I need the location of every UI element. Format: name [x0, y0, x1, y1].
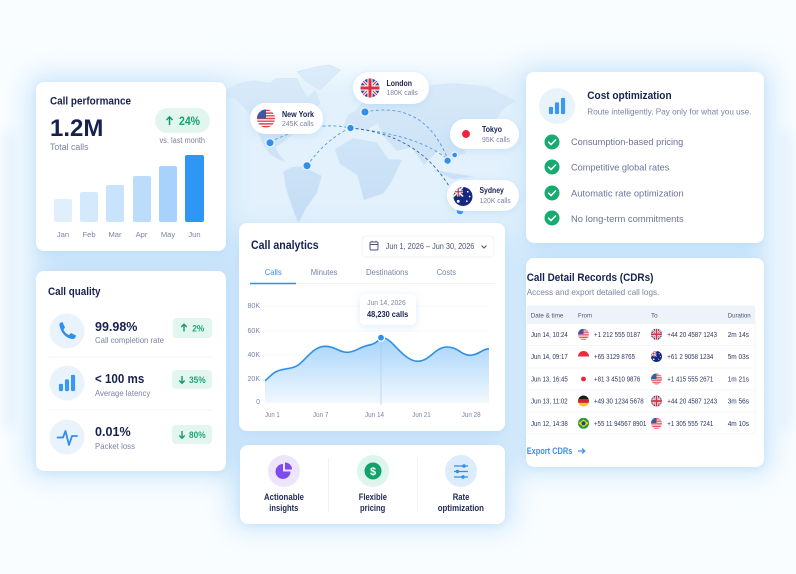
row 5: +1 305 555 7241 [667, 421, 713, 428]
bar chart: May [161, 230, 175, 239]
bar chart: Jan [57, 230, 69, 239]
heading: call performance: Call performance [50, 96, 131, 108]
table [527, 306, 755, 434]
benefit: rate optimization: optimization [438, 503, 484, 513]
row 2: +61 2 9058 1234 [667, 354, 713, 361]
metric: packet loss: 80% [189, 430, 206, 441]
area chart: Jun 7 [313, 412, 328, 419]
bar chart: Mar [108, 230, 122, 239]
row 2: +65 3129 8765 [594, 354, 635, 361]
checklist: Automatic rate optimization [571, 188, 684, 200]
panel: call analytics [239, 223, 505, 431]
connection arcs [270, 110, 460, 208]
heading: call analytics: Call analytics [251, 238, 319, 252]
metric: packet loss: Packet loss [95, 441, 135, 451]
panel: cost optimization [526, 72, 764, 243]
panel: call detail records [526, 258, 764, 467]
panel: call quality [36, 271, 226, 471]
row 3 [531, 374, 749, 384]
benefit: actionable insights [264, 455, 304, 513]
row 2 [531, 351, 749, 362]
map label: New York [250, 103, 323, 134]
background glow [30, 66, 770, 527]
date range selector: Jun 1, 2026 – Jun 30, 2026 [386, 241, 475, 251]
area chart: Jun 14 [365, 412, 384, 419]
row 4: 3m 56s [728, 398, 749, 406]
map label: Sydney: Sydney [480, 185, 504, 195]
tooltip: Jun 14, 2026 [367, 298, 406, 307]
map label: London [353, 72, 429, 104]
row 5: Jun 12, 14:38 [531, 421, 568, 428]
map label: Tokyo: 95K calls [482, 137, 510, 144]
metric: latency [50, 366, 212, 400]
row 5 [531, 418, 749, 429]
checklist: Consumption-based pricing [571, 137, 683, 148]
map label: Sydney [447, 180, 519, 211]
benefit: flexible pricing [357, 455, 389, 513]
tooltip [360, 294, 416, 325]
subtitle: Access and export detailed call logs. [527, 287, 659, 297]
bar chart [54, 155, 204, 239]
row 5: +55 11 94567 8901 [594, 421, 646, 428]
panel: call performance [36, 82, 226, 251]
table: From [578, 312, 592, 320]
date range selector [362, 236, 494, 257]
area chart: 40K [248, 352, 260, 359]
checklist [544, 134, 684, 226]
metric: completion rate: 2% [192, 324, 205, 334]
row 4 [531, 396, 749, 407]
total calls figure: 1.2M [50, 115, 103, 142]
metric: completion rate: 99.98% [95, 320, 137, 334]
row 4: +44 20 4587 1243 [667, 398, 717, 406]
map label: London: 180K calls [386, 90, 418, 97]
growth badge: 24% [179, 116, 200, 128]
tabs: Minutes [311, 267, 337, 277]
growth badge [155, 108, 210, 133]
row 4: +49 30 1234 5678 [594, 398, 644, 406]
table: Duration [728, 312, 751, 320]
row 4: Jun 13, 11:02 [531, 398, 568, 406]
bar chart: Feb [82, 230, 96, 239]
table: Date & time [531, 312, 564, 320]
area chart: 80K [248, 303, 260, 310]
metric: packet loss [50, 420, 212, 454]
area chart: Jun 21 [412, 412, 431, 419]
total calls label: Total calls [50, 142, 89, 152]
metric: packet loss: 0.01% [95, 425, 131, 439]
row 2: Jun 14, 09:17 [531, 354, 568, 361]
tabs: Destinations [366, 267, 408, 277]
map label: London: London [386, 78, 412, 88]
heading: cost optimization: Cost optimization [587, 90, 672, 102]
metric: latency: 35% [189, 375, 206, 386]
area chart: 60K [248, 328, 260, 335]
row 3: +81 3 4510 9876 [594, 376, 640, 384]
comparison label: vs. last month [160, 136, 205, 145]
benefit: rate optimization: Rate [453, 492, 469, 502]
row 1 [531, 329, 749, 340]
row 1: Jun 14, 10:24 [531, 332, 568, 339]
map label: Sydney: 120K calls [480, 198, 511, 205]
area chart [248, 303, 490, 419]
row 1: +44 20 4587 1243 [667, 332, 717, 339]
benefit: actionable insights: insights [269, 503, 298, 513]
row 3: Jun 13, 16:45 [531, 376, 568, 384]
row 3: +1 415 555 2671 [667, 376, 713, 384]
bar chart: Apr [136, 230, 148, 239]
row 2: 5m 03s [728, 354, 749, 361]
metric: latency: Average latency [95, 388, 151, 398]
area chart: 0 [256, 399, 260, 406]
metric: completion rate: Call completion rate [95, 335, 164, 345]
benefit: flexible pricing: Flexible [359, 492, 387, 502]
bar chart: Jun [188, 230, 201, 239]
panel: benefits [240, 445, 505, 524]
export link: Export CDRs [527, 446, 572, 456]
area chart: 20K [248, 376, 260, 383]
metric: latency: < 100 ms [95, 372, 144, 386]
subtitle: Route intelligently. Pay only for what you use. [587, 106, 752, 116]
benefit: rate optimization [438, 455, 484, 513]
row 1: 2m 14s [728, 332, 749, 339]
heading: call quality: Call quality [48, 286, 100, 298]
tabs [250, 267, 495, 284]
tabs: Costs [437, 267, 456, 277]
benefit: flexible pricing: pricing [360, 503, 385, 513]
row 1: +1 212 555 0187 [594, 332, 640, 339]
table: To [651, 312, 658, 320]
checklist: No long-term commitments [571, 214, 684, 225]
heading: CDRs: Call Detail Records (CDRs) [527, 272, 654, 284]
area chart: Jun 1 [265, 412, 280, 419]
world map [227, 65, 515, 223]
edge bands [7, 130, 790, 430]
map label: New York: New York [282, 109, 314, 119]
icon: signal bars [539, 88, 575, 124]
tabs: Calls [265, 267, 282, 277]
map pins [266, 108, 464, 215]
map label: Tokyo [450, 119, 519, 149]
area chart: Jun 28 [462, 412, 481, 419]
benefit: flexible pricing: $ [370, 466, 376, 478]
row 5: 4m 10s [728, 421, 749, 428]
row 3: 1m 21s [728, 376, 749, 384]
map label: Tokyo: Tokyo [482, 124, 502, 134]
metric: completion rate [50, 314, 212, 348]
tooltip: 48,230 calls [367, 309, 409, 319]
map label: New York: 245K calls [282, 121, 314, 128]
checklist: Competitive global rates [571, 162, 670, 174]
benefit: actionable insights: Actionable [264, 492, 304, 502]
